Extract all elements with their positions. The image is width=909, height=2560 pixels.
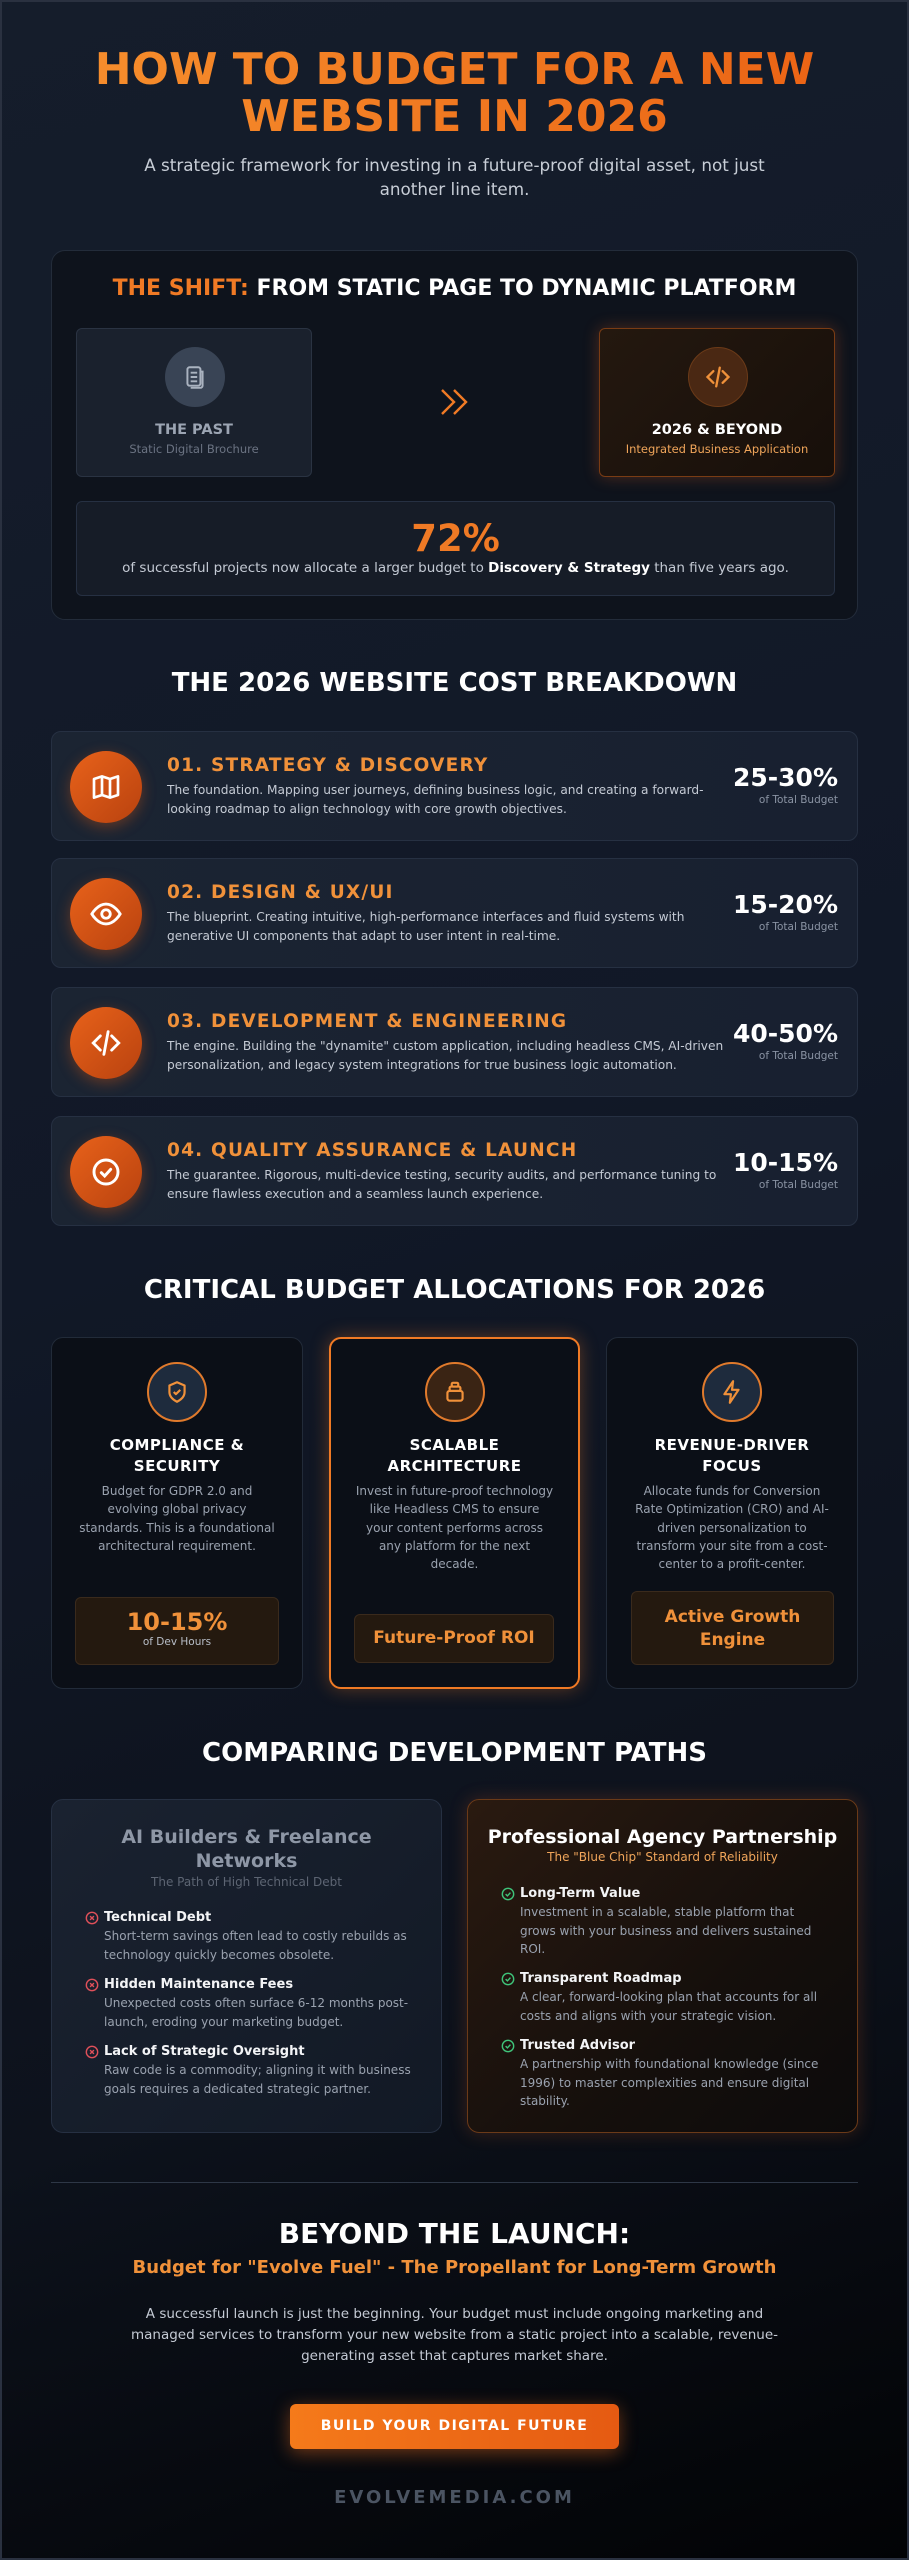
- item: hidden fees: Unexpected costs often surface 6-12 months post-: [104, 1996, 408, 2010]
- card: compliance: Budget for GDPR 2.0 and: [102, 1484, 252, 1498]
- card: compliance: evolving global privacy: [107, 1502, 247, 1516]
- box: the past: [76, 328, 312, 477]
- stat box: 10-15%: [127, 1608, 227, 1636]
- card: scalable: decade.: [431, 1557, 478, 1571]
- item: long-term: [502, 1886, 811, 1956]
- heading: comparing paths: COMPARING DEVELOPMENT PATHS: [202, 1738, 707, 1768]
- item: roadmap: A clear, forward-looking plan that accounts for all: [520, 1990, 817, 2004]
- card: design: generative UI components that adapt to user intent in real-time.: [167, 929, 560, 943]
- card: design: [51, 858, 858, 968]
- card: design: The blueprint. Creating intuitive, high-performance interfaces and fluid systems with: [167, 910, 684, 924]
- panel: AI builders: [51, 1799, 442, 2133]
- card: QA: ensure flawless execution and a seamless launch experience.: [167, 1187, 543, 1201]
- item: technical debt: Technical Debt: [104, 1910, 211, 1925]
- button: CTA: BUILD YOUR DIGITAL FUTURE: [321, 2418, 588, 2434]
- heading: critical allocations: CRITICAL BUDGET ALLOCATIONS FOR 2026: [144, 1275, 765, 1305]
- icon: layers: [425, 1362, 485, 1422]
- stat box: Active Growth: [665, 1607, 800, 1627]
- title: [0, 46, 909, 140]
- stat box: of Dev Hours: [143, 1636, 211, 1648]
- card: scalable: like Headless CMS to ensure: [370, 1502, 539, 1516]
- card: scalable: your content performs across: [366, 1521, 543, 1535]
- item: hidden fees: launch, eroding your marketing budget.: [104, 2014, 343, 2028]
- card: scalable: Invest in future-proof technology: [356, 1484, 553, 1498]
- icon: eye: [70, 878, 142, 950]
- box: the past: Static Digital Brochure: [129, 442, 259, 456]
- button: CTA: [290, 2404, 619, 2449]
- card: QA: 04. QUALITY ASSURANCE & LAUNCH: [167, 1140, 577, 1161]
- card: strategy: of Total Budget: [759, 794, 838, 806]
- card: revenue: REVENUE-DRIVER: [655, 1436, 809, 1454]
- card: development: [51, 987, 858, 1097]
- icon: document: [165, 347, 225, 407]
- item: long-term: Investment in a scalable, stable platform that: [520, 1905, 794, 1919]
- subtitle: another line item.: [380, 179, 529, 199]
- heading: cost breakdown: THE 2026 WEBSITE COST BREAKDOWN: [172, 668, 737, 698]
- card: development: 40-50%: [733, 1019, 838, 1048]
- card: QA: [51, 1116, 858, 1226]
- card: QA: of Total Budget: [759, 1179, 838, 1191]
- stat: 72%: 72%: [411, 517, 500, 560]
- card: revenue: FOCUS: [702, 1457, 762, 1475]
- arrow: chevrons: [441, 389, 468, 415]
- card: development: The engine. Building the "dynamite" custom application, including headless CMS, AI-driven: [167, 1039, 723, 1053]
- card: compliance: SECURITY: [134, 1457, 220, 1475]
- title: HOW TO BUDGET FOR A NEW: [95, 44, 814, 95]
- card: development: 03. DEVELOPMENT & ENGINEERING: [167, 1011, 567, 1032]
- card: scalable: any platform for the next: [379, 1539, 530, 1553]
- card: strategy: 01. STRATEGY & DISCOVERY: [167, 755, 488, 776]
- icon: code: [688, 347, 748, 407]
- item: oversight: [86, 2044, 411, 2096]
- icon: code: [70, 1007, 142, 1079]
- item: hidden fees: [86, 1977, 408, 2028]
- item: advisor: stability.: [520, 2094, 570, 2108]
- card: strategy: looking roadmap to align technology with core growth objectives.: [167, 802, 567, 816]
- card: revenue: [606, 1337, 858, 1689]
- item: long-term: Long-Term Value: [520, 1886, 640, 1901]
- panel: AI builders: AI Builders & Freelance: [121, 1826, 372, 1848]
- box: 2026 & beyond: [599, 328, 835, 477]
- card: design: 15-20%: [733, 890, 838, 919]
- card: development: of Total Budget: [759, 1050, 838, 1062]
- card: scalable: [329, 1337, 580, 1689]
- item: roadmap: Transparent Roadmap: [520, 1971, 682, 1986]
- subtitle: [144, 155, 765, 199]
- box: the past: THE PAST: [155, 422, 233, 438]
- item: roadmap: costs and aligns with your strategic vision.: [520, 2008, 776, 2022]
- card: compliance: standards. This is a foundational: [79, 1521, 275, 1535]
- card: QA: The guarantee. Rigorous, multi-device testing, security audits, and performance tuning to: [167, 1168, 716, 1182]
- paragraph: managed services to transform your new website from a static project into a scalable, revenue-: [131, 2327, 778, 2343]
- icon: bolt: [702, 1362, 762, 1422]
- card: strategy: [51, 731, 858, 841]
- stat box: Engine: [700, 1630, 765, 1650]
- item: oversight: Raw code is a commodity; aligning it with business: [104, 2063, 411, 2077]
- heading: beyond the launch: BEYOND THE LAUNCH:: [279, 2217, 630, 2250]
- card: compliance: [51, 1337, 303, 1689]
- icon: shield: [147, 1362, 207, 1422]
- panel: agency: The "Blue Chip" Standard of Reliability: [547, 1850, 778, 1864]
- item: advisor: A partnership with foundational knowledge (since: [520, 2057, 818, 2071]
- card: revenue: center to a profit-center.: [658, 1557, 806, 1571]
- panel: agency: Professional Agency Partnership: [488, 1826, 837, 1848]
- card: compliance: architectural requirement.: [98, 1539, 256, 1553]
- item: long-term: ROI.: [520, 1942, 545, 1956]
- card: QA: 10-15%: [733, 1148, 838, 1177]
- item: roadmap: [502, 1971, 817, 2022]
- panel: agency: [467, 1799, 858, 2133]
- item: oversight: goals requires a dedicated strategic partner.: [104, 2082, 371, 2096]
- item: advisor: Trusted Advisor: [520, 2038, 635, 2053]
- card: strategy: 25-30%: [733, 763, 838, 792]
- icon: check circle: [70, 1136, 142, 1208]
- card: scalable: SCALABLE: [410, 1436, 499, 1454]
- stat box: [354, 1614, 554, 1663]
- subtitle: A strategic framework for investing in a future-proof digital asset, not just: [144, 155, 765, 175]
- item: advisor: [502, 2038, 818, 2108]
- paragraph: [131, 2306, 778, 2364]
- title: WEBSITE IN 2026: [241, 91, 668, 142]
- panel: AI builders: The Path of High Technical Debt: [151, 1875, 342, 1889]
- stat box: [631, 1591, 834, 1665]
- box: 2026 & beyond: 2026 & BEYOND: [652, 422, 782, 438]
- stat box: [75, 1597, 279, 1665]
- card: strategy: The foundation. Mapping user journeys, defining business logic, and creating a forward-: [167, 783, 704, 797]
- card: compliance: COMPLIANCE &: [110, 1436, 244, 1454]
- shift heading: THE SHIFT: FROM STATIC PAGE TO DYNAMIC PLATFORM: [113, 276, 796, 301]
- card: design: of Total Budget: [759, 921, 838, 933]
- card: revenue: Allocate funds for Conversion: [644, 1484, 820, 1498]
- paragraph: A successful launch is just the beginning. Your budget must include ongoing marketing and: [146, 2306, 763, 2322]
- item: technical debt: [86, 1910, 407, 1962]
- card: development: personalization, and legacy system integrations for true business logic automation.: [167, 1058, 677, 1072]
- subheading: evolve fuel: Budget for "Evolve Fuel" - The Propellant for Long-Term Growth: [133, 2257, 776, 2278]
- item: long-term: grows with your business and delivers sustained: [520, 1924, 811, 1938]
- panel: AI builders: Networks: [196, 1850, 297, 1872]
- card: scalable: ARCHITECTURE: [388, 1457, 522, 1475]
- item: technical debt: Short-term savings often lead to costly rebuilds as: [104, 1929, 407, 1943]
- footer brand: EVOLVEMEDIA.COM: [334, 2487, 575, 2508]
- card: revenue: transform your site from a cost-: [636, 1539, 828, 1553]
- item: oversight: Lack of Strategic Oversight: [104, 2044, 305, 2059]
- stat: 72%: of successful projects now allocate a larger budget to Discovery & Strategy than five years ago.: [122, 560, 789, 576]
- stat box: Future-Proof ROI: [373, 1628, 535, 1648]
- paragraph: generating asset that captures market share.: [301, 2348, 608, 2364]
- card: revenue: Rate Optimization (CRO) and AI-: [635, 1502, 829, 1516]
- card: design: 02. DESIGN & UX/UI: [167, 882, 394, 903]
- card: revenue: driven personalization to: [657, 1521, 807, 1535]
- item: advisor: 1996) to master complexities and ensure digital: [520, 2076, 809, 2090]
- item: technical debt: technology quickly becomes obsolete.: [104, 1948, 334, 1962]
- icon: map: [70, 751, 142, 823]
- item: hidden fees: Hidden Maintenance Fees: [104, 1977, 293, 1992]
- stat: 72%: [76, 501, 835, 596]
- box: 2026 & beyond: Integrated Business Application: [626, 442, 808, 456]
- panel: the shift: [51, 250, 858, 620]
